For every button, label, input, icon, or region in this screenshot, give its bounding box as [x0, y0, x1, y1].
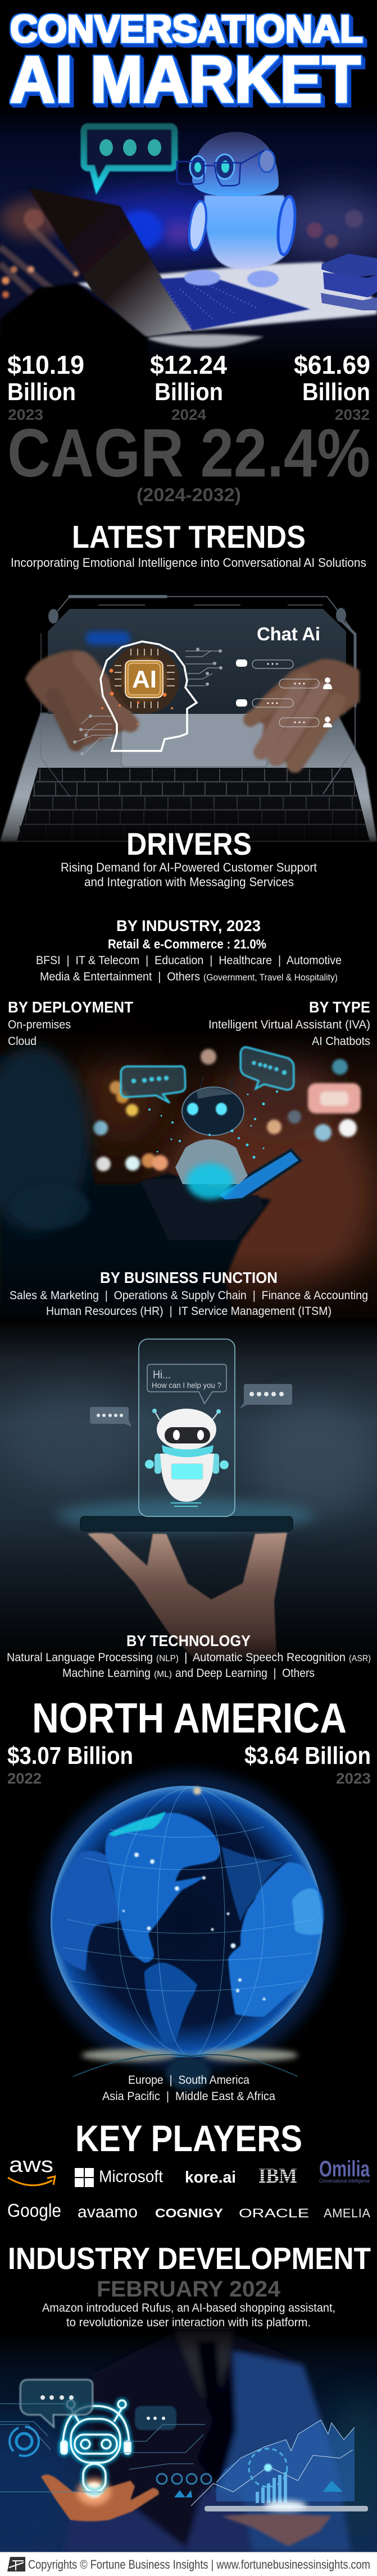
by industry block: Media & Entertainment | Others	[40, 970, 200, 983]
bubble: Hi: How can I help you ?	[152, 1381, 221, 1390]
AI head icon	[73, 641, 222, 755]
bubble: right dots	[239, 1384, 292, 1409]
by deployment block: On-premises	[8, 1018, 71, 1032]
logo: IBM: IBM	[258, 2165, 297, 2188]
by business function block	[10, 1269, 368, 1318]
chat bubbles neon	[121, 1047, 294, 1103]
logo: kore.ai: kore.ai	[185, 2169, 236, 2187]
market value 2024: 2024	[171, 406, 206, 423]
stacked books	[321, 254, 377, 310]
market value 2023: Billion	[7, 378, 76, 406]
by type block: BY TYPE	[309, 998, 370, 1016]
by technology block: BY TECHNOLOGY	[126, 1632, 251, 1649]
north america value 2023	[244, 1742, 371, 1787]
photo: robot on phone in street	[0, 1030, 377, 1322]
by industry block: (Government, Travel & Hospitality)	[203, 972, 338, 983]
by type block: Intelligent Virtual Assistant (IVA)	[208, 1018, 370, 1032]
drivers text: Rising Demand for AI-Powered Customer Support	[61, 860, 317, 874]
north america value 2022	[7, 1742, 133, 1787]
market value 2032: Billion	[302, 378, 370, 406]
data chart on tablet	[157, 2420, 355, 2506]
other regions: Asia Pacific | Middle East & Africa	[102, 2089, 275, 2103]
horizon flare	[73, 2049, 298, 2091]
market value 2023	[7, 350, 84, 423]
logo: avaamo: avaamo	[78, 2203, 138, 2221]
hand	[88, 1533, 287, 1661]
north america value 2022: $3.07 Billion	[7, 1742, 133, 1770]
hero illustration: robot and laptop	[0, 107, 377, 370]
HUD ring	[10, 2427, 39, 2456]
by technology block: Machine Learning	[62, 1666, 151, 1680]
industry development text: Amazon introduced Rufus, an AI-based shopping assistant,	[42, 2301, 335, 2314]
by technology block	[7, 1632, 371, 1680]
industry development text: to revolutionize user interaction with its platform.	[66, 2316, 311, 2329]
by technology block: |	[184, 1651, 188, 1664]
white robot	[145, 1409, 229, 1506]
robot	[177, 132, 297, 287]
logo: Microsoft: Microsoft	[99, 2167, 163, 2186]
title	[10, 7, 363, 117]
by deployment block	[8, 998, 133, 1048]
market value 2024	[150, 350, 227, 423]
by type block	[208, 998, 370, 1048]
other regions: Europe | South America	[128, 2073, 249, 2087]
icon: chat bubble	[84, 126, 175, 187]
globe	[36, 1771, 337, 2091]
heading: key players: KEY PLAYERS	[75, 2117, 302, 2159]
latest trends text: Incorporating Emotional Intelligence into Conversational AI Solutions	[11, 556, 366, 570]
by technology block: (ML)	[154, 1670, 172, 1679]
logo: Microsoft	[75, 2167, 163, 2187]
by industry block: Retail & e-Commerce : 21.0%	[108, 937, 266, 951]
AI head icon: AI	[132, 666, 157, 693]
by deployment block: Cloud	[8, 1034, 37, 1048]
title: AI MARKET	[10, 43, 361, 117]
by industry block: BFSI | IT & Telecom | Education | Healthcare | Automotive	[36, 954, 342, 967]
globe graticule	[63, 1787, 315, 2056]
date: february 2024: FEBRUARY 2024	[97, 2277, 281, 2302]
by industry block: BY INDUSTRY, 2023	[116, 917, 261, 934]
bokeh lights	[93, 1049, 361, 1171]
CAGR period: (2024-2032)	[137, 484, 241, 505]
bubble: Hi	[147, 1364, 226, 1404]
circuit traces	[0, 2404, 205, 2492]
by industry block	[36, 917, 342, 983]
bubble: left dots	[90, 1407, 131, 1427]
photo: robot hologram above phone	[0, 1319, 377, 1667]
by technology block: Natural Language Processing	[7, 1651, 153, 1664]
hooded figure	[0, 1047, 271, 1322]
table surface	[77, 262, 377, 331]
holographic robot	[61, 2400, 130, 2492]
by deployment block: BY DEPLOYMENT	[8, 998, 133, 1016]
by type block: AI Chatbots	[312, 1034, 370, 1048]
by business function block: BY BUSINESS FUNCTION	[100, 1269, 278, 1286]
glowing robot	[148, 1076, 278, 1199]
right chat bubble	[135, 2406, 176, 2430]
chat AI label: Chat Ai	[257, 624, 320, 644]
logo: Oracle: ORACLE	[239, 2206, 309, 2220]
suit	[62, 2329, 351, 2552]
other regions	[102, 2073, 275, 2103]
market value 2024: $12.24	[150, 350, 227, 379]
foreground silhouette	[0, 283, 147, 370]
chat rows	[236, 659, 332, 727]
logo: Fortune Business Insights	[7, 2557, 25, 2572]
laptop	[29, 188, 310, 348]
phone hologram frame	[139, 1339, 235, 1516]
logo: Google: Google	[7, 2200, 61, 2221]
by technology block: (ASR)	[349, 1654, 371, 1663]
left chat bubble	[20, 2380, 93, 2427]
market value 2023: 2023	[8, 406, 43, 423]
title: CONVERSATIONAL	[10, 7, 363, 51]
market value 2032: 2032	[335, 406, 370, 423]
phone	[216, 1150, 301, 1201]
continents	[52, 1812, 324, 2056]
drivers text	[61, 860, 317, 889]
by technology block: (NLP)	[156, 1654, 179, 1663]
laptop deck and keyboard	[0, 713, 377, 847]
market value 2023: $10.19	[7, 350, 84, 379]
by technology block: Automatic Speech Recognition	[193, 1651, 346, 1664]
market value 2032	[294, 350, 370, 423]
logo: aws	[8, 2153, 55, 2185]
industry development text	[42, 2301, 335, 2329]
logo: Amelia: AMELIA	[324, 2206, 370, 2220]
bubble: Hi: Hi...	[153, 1369, 171, 1381]
logo: aws: aws	[9, 2153, 53, 2177]
city lights	[122, 1853, 265, 2000]
market value 2032: $61.69	[294, 350, 370, 379]
hands	[25, 650, 360, 764]
market value 2024: Billion	[155, 378, 223, 406]
photo: businessman with robot hologram	[0, 2329, 377, 2559]
north america value 2023: 2023	[336, 1770, 371, 1787]
footer bar	[0, 2552, 377, 2576]
by technology block: and Deep Learning | Others	[175, 1666, 315, 1680]
logo: Cognigy: COGNIGY	[155, 2206, 223, 2220]
tablet	[205, 2501, 368, 2546]
open hand	[41, 2474, 159, 2521]
north america value 2022: 2022	[7, 1770, 42, 1787]
heading: drivers: DRIVERS	[126, 826, 252, 861]
laptop photo with chat AI hologram	[0, 597, 377, 847]
HUD panel	[41, 597, 355, 797]
heading: latest trends: LATEST TRENDS	[72, 519, 306, 555]
by business function block: Human Resources (HR) | IT Service Management (ITSM)	[46, 1304, 331, 1318]
drivers text: and Integration with Messaging Services	[84, 875, 294, 889]
phone body	[80, 1516, 293, 1531]
